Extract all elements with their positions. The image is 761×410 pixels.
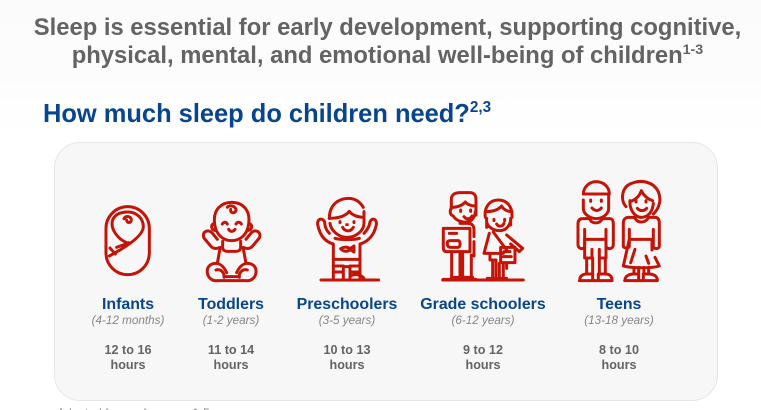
age: grade schoolers: (6-12 years) <box>451 314 515 327</box>
hours: infants <box>105 343 151 372</box>
hours: teens: 8 to 10 <box>599 343 639 357</box>
title: Sleep is essential for early development, supporting cognitive, <box>34 14 741 40</box>
age: teens: (13-18 years) <box>584 314 654 327</box>
age: infants: (4-12 months) <box>92 314 164 327</box>
hours: toddlers <box>208 343 254 372</box>
age: toddlers: (1-2 years) <box>203 314 259 327</box>
hours: preschoolers: 10 to 13 <box>324 343 370 357</box>
title: physical, mental, and emotional well-being of children1-3 <box>72 42 703 68</box>
hours: teens: hours <box>602 358 636 372</box>
hours: teens <box>599 343 639 372</box>
label: teens: Teens <box>597 296 641 313</box>
panel: sleep needs by age <box>54 142 718 401</box>
hours: preschoolers: hours <box>330 358 364 372</box>
label: infants: Infants <box>102 296 154 313</box>
hours: grade schoolers: hours <box>466 358 500 372</box>
label: grade schoolers: Grade schoolers <box>420 296 546 313</box>
icon: toddler <box>203 202 260 281</box>
label: preschoolers: Preschoolers <box>297 296 397 313</box>
icon: preschooler <box>318 198 379 280</box>
hours: infants: 12 to 16 <box>105 343 151 357</box>
title <box>34 14 741 68</box>
hours: toddlers: hours <box>214 358 248 372</box>
hours: preschoolers <box>324 343 370 372</box>
heading: How much sleep do children need?2,3 <box>43 99 491 128</box>
hours: infants: hours <box>110 358 145 372</box>
age: preschoolers: (3-5 years) <box>319 314 375 327</box>
hours: grade schoolers: 9 to 12 <box>463 343 503 357</box>
hours: toddlers: 11 to 14 <box>208 343 254 357</box>
hours: grade schoolers <box>463 343 503 372</box>
icon: teens <box>578 181 660 281</box>
icon: grade schoolers <box>443 193 523 280</box>
icon: infant <box>106 207 149 275</box>
label: toddlers: Toddlers <box>198 296 264 313</box>
